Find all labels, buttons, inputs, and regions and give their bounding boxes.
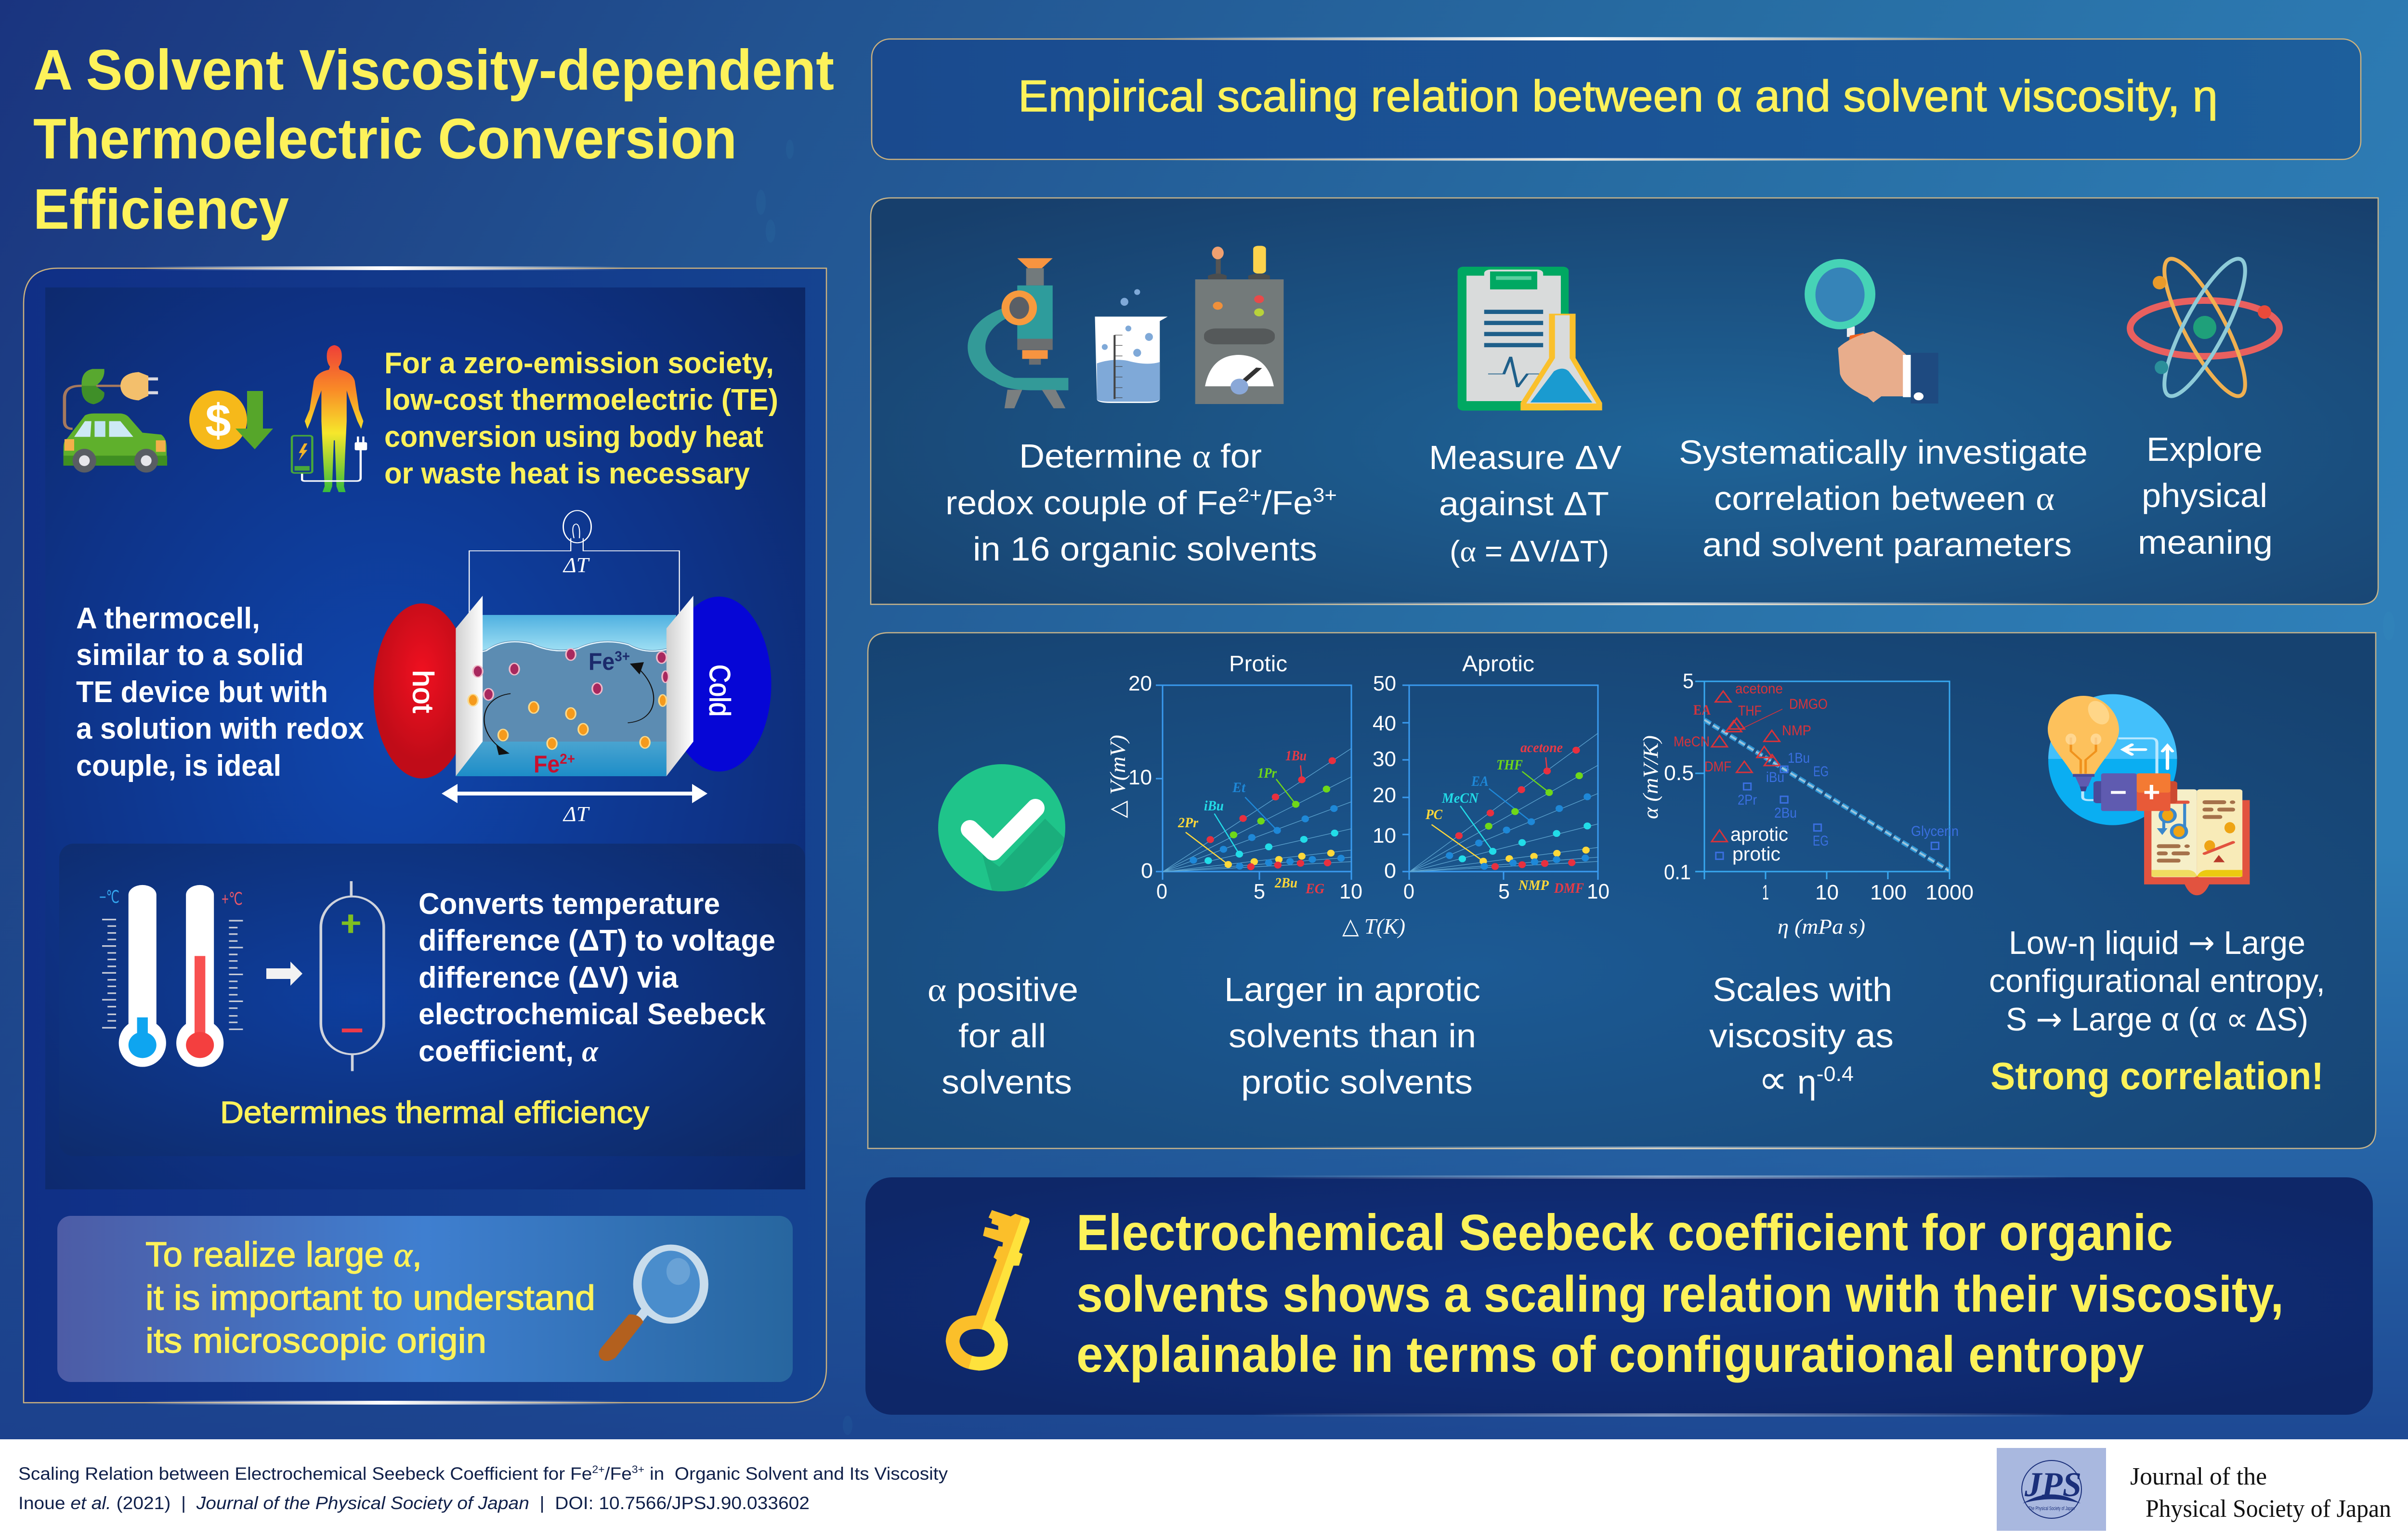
text: alpha positive: solvents <box>942 1063 1072 1101</box>
chart: protic delta V against delta T: 2Bu <box>1274 875 1297 891</box>
diagram: thermocell with hot and cold sides: hot <box>407 670 439 713</box>
icon: atom <box>2130 250 2279 405</box>
chart: alpha against viscosity: 2Pr <box>1738 792 1757 808</box>
chart: alpha against viscosity: acetone <box>1735 681 1783 697</box>
text: conclusion: explainable in terms of configurational entropy <box>1076 1326 2144 1383</box>
text block: thermocell description: A thermocell, <box>76 602 260 635</box>
text: alpha positive <box>928 971 1078 1101</box>
panel: left background and thermocell introduction <box>24 266 826 1405</box>
diagram: thermocell with hot and cold sides: Fe <box>589 648 616 675</box>
chart: alpha against viscosity: α (mV/K) <box>1639 735 1662 819</box>
chart: alpha against viscosity: EG <box>1813 833 1829 849</box>
text: explore physical meaning: physical <box>2142 477 2267 514</box>
chart: protic delta V against delta T: iBu <box>1204 798 1224 814</box>
icon: magnifier in hand <box>1805 259 1938 404</box>
chart: protic delta V against delta T: 5 <box>1254 880 1265 903</box>
text block: Seebeck coefficient: difference (ΔT) to voltage <box>419 924 775 957</box>
icon: magnifying glass <box>599 1248 704 1361</box>
title <box>33 38 834 241</box>
chart: protic delta V against delta T <box>1105 651 1362 903</box>
chart: alpha against viscosity: 1000 <box>1925 881 1974 904</box>
text: scales with viscosity: ∝ η <box>1758 1056 1816 1103</box>
diagram: thermocell with hot and cold sides <box>374 510 771 826</box>
icon: clipboard with flask <box>1458 267 1600 411</box>
callout: microscopic origin <box>57 1216 793 1382</box>
text block: zero-emission society: For a zero-emission society, <box>384 347 774 380</box>
logo: JPS: JPS <box>2024 1465 2081 1504</box>
text: determine alpha: redox couple of Fe <box>945 484 1225 521</box>
text block: Seebeck coefficient <box>419 887 775 1068</box>
chart: protic delta V against delta T: 10 <box>1339 880 1362 903</box>
text: larger in aprotic: Larger in aprotic <box>1224 971 1480 1008</box>
text: configurational entropy <box>1989 924 2325 1039</box>
icon: dollar coin with down arrow: $ <box>205 395 231 446</box>
text: investigate correlation: correlation between α <box>1714 480 2055 518</box>
axis label: delta T: △ T(K) <box>1342 914 1405 938</box>
title: Thermoelectric Conversion <box>33 107 737 171</box>
text: determine alpha: in 16 organic solvents <box>973 530 1317 568</box>
text block: thermocell description: couple, is ideal <box>76 749 281 782</box>
chart: aprotic delta V against delta T: 30 <box>1373 747 1396 771</box>
chart: aprotic delta V against delta T: MeCN <box>1441 790 1479 806</box>
text: scales with viscosity: viscosity as <box>1709 1017 1894 1055</box>
chart: aprotic delta V against delta T: acetone <box>1520 740 1563 756</box>
chart: alpha against viscosity: η (mPa s) <box>1778 915 1865 938</box>
text block: Seebeck coefficient: electrochemical Seebeck <box>419 998 766 1031</box>
callout: microscopic origin: To realize large α, <box>145 1236 422 1274</box>
diagram: thermocell with hot and cold sides: 3+ <box>615 649 630 665</box>
chart: protic delta V against delta T: Protic <box>1229 651 1287 676</box>
text: explore physical meaning <box>2138 430 2273 561</box>
text: scales with viscosity: Scales with <box>1713 971 1892 1008</box>
header: empirical scaling relation: Empirical scaling relation between α and solvent viscosity, η <box>1018 72 2218 121</box>
text: explore physical meaning: meaning <box>2138 523 2273 561</box>
journal name <box>2130 1463 2391 1523</box>
title: A Solvent Viscosity-dependent <box>33 38 834 102</box>
text: conclusion: Electrochemical Seebeck coefficient for organic <box>1076 1204 2173 1261</box>
title: Efficiency <box>33 177 289 241</box>
chart: alpha against viscosity: 100 <box>1870 881 1907 904</box>
chart: protic delta V against delta T: 10 <box>1128 766 1152 789</box>
chart: protic delta V against delta T: 1Bu <box>1285 748 1307 764</box>
chart: alpha against viscosity: 1Bu <box>1788 750 1810 766</box>
text: alpha positive: for all <box>958 1017 1046 1055</box>
arrow <box>266 962 302 986</box>
citation: 3+ <box>632 1463 644 1475</box>
icon: microscope <box>968 258 1068 408</box>
text block: Seebeck coefficient: Converts temperature <box>419 887 720 921</box>
text block: thermocell description: similar to a solid <box>76 639 304 672</box>
chart: protic delta V against delta T: △ V(mV) <box>1105 735 1130 818</box>
panel: temperature to voltage conversion: −℃ <box>99 887 119 907</box>
text: determine alpha: 2+ <box>1238 483 1262 506</box>
text: alpha positive: α positive <box>928 971 1078 1009</box>
text: larger in aprotic <box>1224 971 1480 1101</box>
panel: results <box>868 633 2376 1149</box>
callout: microscopic origin: its microscopic origin <box>145 1322 486 1360</box>
chart: aprotic delta V against delta T: 0 <box>1403 880 1414 903</box>
icon: thermometers <box>102 885 243 1067</box>
text: investigate correlation: Systematically investigate <box>1679 433 2088 471</box>
text: determine alpha: Determine α for <box>1019 437 1262 475</box>
header: empirical scaling relation <box>872 37 2361 161</box>
text block: zero-emission society: conversion using body heat <box>384 420 763 454</box>
chart: alpha against viscosity: 2Bu <box>1774 805 1797 821</box>
text block: thermocell description <box>76 602 364 782</box>
logo: JPS: The Physical Society of Japan <box>2028 1506 2075 1512</box>
chart: alpha against viscosity: DMGO <box>1789 696 1828 712</box>
text block: zero-emission society: or waste heat is necessary <box>384 457 750 490</box>
chart: protic delta V against delta T: 0 <box>1141 859 1153 883</box>
chart: aprotic delta V against delta T: DMF <box>1554 880 1584 896</box>
text: investigate correlation <box>1679 433 2088 563</box>
chart: alpha against viscosity: EA <box>1693 702 1711 718</box>
text: larger in aprotic: protic solvents <box>1241 1063 1473 1101</box>
callout: microscopic origin: it is important to understand <box>145 1279 595 1317</box>
text: configurational entropy: configurational entropy, <box>1989 963 2325 999</box>
footer <box>0 1439 2408 1538</box>
icon: light bulb, battery and book <box>2048 694 2250 895</box>
text: investigate correlation: and solvent parameters <box>1702 526 2072 563</box>
icon: gold key <box>946 1210 1030 1370</box>
chart: alpha against viscosity: EG <box>1813 764 1829 780</box>
icon: voltage capsule <box>321 881 384 1071</box>
citation: in Organic Solvent and Its Viscosity <box>644 1464 948 1484</box>
chart: aprotic delta V against delta T: THF <box>1496 757 1523 773</box>
chart: alpha against viscosity: protic <box>1732 844 1780 865</box>
text: configurational entropy: Low-η liquid → Large <box>2009 924 2305 962</box>
diagram: thermocell with hot and cold sides: Cold <box>704 665 736 717</box>
chart: alpha against viscosity: NMP <box>1782 723 1811 739</box>
text: measure delta V: against ΔT <box>1439 485 1609 522</box>
chart: aprotic delta V against delta T: Aprotic <box>1462 651 1534 676</box>
chart: aprotic delta V against delta T: EA <box>1471 773 1489 789</box>
chart: aprotic delta V against delta T: 20 <box>1373 783 1396 807</box>
text: measure delta V <box>1429 439 1622 568</box>
chart: aprotic delta V against delta T <box>1373 651 1610 903</box>
citation: 2+ <box>592 1463 605 1475</box>
panel: temperature to voltage conversion: +℃ <box>222 889 243 909</box>
chart: alpha against viscosity: aprotic <box>1730 824 1788 845</box>
chart: aprotic delta V against delta T: 5 <box>1498 880 1510 903</box>
chart: alpha against viscosity: 1 <box>1762 881 1769 904</box>
text: conclusion: solvents shows a scaling relation with their viscosity, <box>1076 1266 2284 1323</box>
text block: zero-emission society <box>384 347 778 490</box>
text: strong correlation: Strong correlation! <box>1990 1055 2324 1097</box>
chart: protic delta V against delta T: 1Pr <box>1257 765 1277 781</box>
citation: /Fe <box>605 1464 632 1484</box>
chart: alpha against viscosity <box>1639 669 1974 938</box>
icon: human body heat with phone charger <box>292 345 367 492</box>
chart: alpha against viscosity: DMF <box>1704 759 1731 775</box>
panel: conclusion banner <box>865 1175 2373 1417</box>
citation: Inoue et al. (2021) | Journal of the Physical Society of Japan | DOI: 10.7566/JPSJ.90.033602 <box>18 1493 810 1513</box>
text: determine alpha: 3+ <box>1313 483 1337 506</box>
chart: alpha against viscosity: THF <box>1738 703 1762 719</box>
diagram: thermocell with hot and cold sides: ΔT <box>563 802 590 826</box>
text: scales with viscosity: -0.4 <box>1817 1062 1854 1086</box>
diagram: thermocell with hot and cold sides: 2+ <box>560 751 575 767</box>
panel: temperature to voltage conversion <box>59 844 805 1156</box>
chart: alpha against viscosity: 5 <box>1683 669 1694 693</box>
chart: aprotic delta V against delta T: PC <box>1425 807 1443 822</box>
chart: alpha against viscosity: 10 <box>1815 881 1839 904</box>
chart: aprotic delta V against delta T: 40 <box>1373 712 1396 735</box>
text block: Seebeck coefficient: difference (ΔV) via <box>419 961 679 994</box>
chart: protic delta V against delta T: 2Pr <box>1178 815 1198 831</box>
chart: protic delta V against delta T: 20 <box>1128 672 1152 695</box>
chart: aprotic delta V against delta T: 10 <box>1373 824 1396 847</box>
icon: beaker <box>1095 289 1168 403</box>
icon: meter <box>1195 246 1283 404</box>
text block: thermocell description: a solution with redox <box>76 712 364 745</box>
journal name: Journal of the <box>2130 1463 2267 1490</box>
citation <box>18 1463 948 1513</box>
text: measure delta V: (α = ΔV/ΔT) <box>1450 535 1609 568</box>
chart: alpha against viscosity: Glycerin <box>1911 823 1959 839</box>
chart: protic delta V against delta T: 0 <box>1156 880 1167 903</box>
chart: protic delta V against delta T: Et <box>1232 780 1246 795</box>
text: configurational entropy: S → Large α (α ∝ ΔS) <box>2006 1001 2308 1039</box>
chart: aprotic delta V against delta T: 0 <box>1384 859 1396 883</box>
chart: aprotic delta V against delta T: 50 <box>1373 672 1396 695</box>
chart: alpha against viscosity: 0.5 <box>1664 761 1694 785</box>
chart: protic delta V against delta T: EG <box>1305 881 1324 897</box>
chart: alpha against viscosity: iBu <box>1766 769 1784 785</box>
text: conclusion <box>1076 1204 2284 1383</box>
text: determine alpha <box>945 437 1337 568</box>
text: scales with viscosity <box>1709 971 1894 1103</box>
icon: electric car with plug <box>64 369 167 472</box>
chart: aprotic delta V against delta T: 10 <box>1587 880 1610 903</box>
chart: aprotic delta V against delta T: NMP <box>1518 877 1549 893</box>
text block: thermocell description: TE device but with <box>76 676 328 709</box>
text: measure delta V: Measure ΔV <box>1429 439 1622 476</box>
icon: dollar coin with down arrow <box>189 391 273 449</box>
text: determines thermal efficiency: Determines thermal efficiency <box>220 1095 649 1130</box>
chart: alpha against viscosity: 0.1 <box>1664 860 1691 884</box>
journal name: Physical Society of Japan <box>2146 1495 2391 1523</box>
diagram: thermocell with hot and cold sides: Fe <box>534 751 562 778</box>
diagram: thermocell with hot and cold sides: ΔT <box>563 553 590 577</box>
chart: alpha against viscosity: MeCN <box>1674 734 1710 750</box>
text: determine alpha: /Fe <box>1262 484 1313 521</box>
text: larger in aprotic: solvents than in <box>1229 1017 1476 1055</box>
text block: Seebeck coefficient: coefficient, α <box>419 1035 599 1068</box>
panel: experimental steps <box>871 198 2378 605</box>
text: explore physical meaning: Explore <box>2146 430 2263 468</box>
text block: zero-emission society: low-cost thermoelectric (TE) <box>384 383 778 417</box>
citation: Scaling Relation between Electrochemical Seebeck Coefficient for Fe <box>18 1464 565 1484</box>
icon: green check mark <box>938 764 1067 896</box>
logo: JPS <box>1997 1448 2106 1531</box>
